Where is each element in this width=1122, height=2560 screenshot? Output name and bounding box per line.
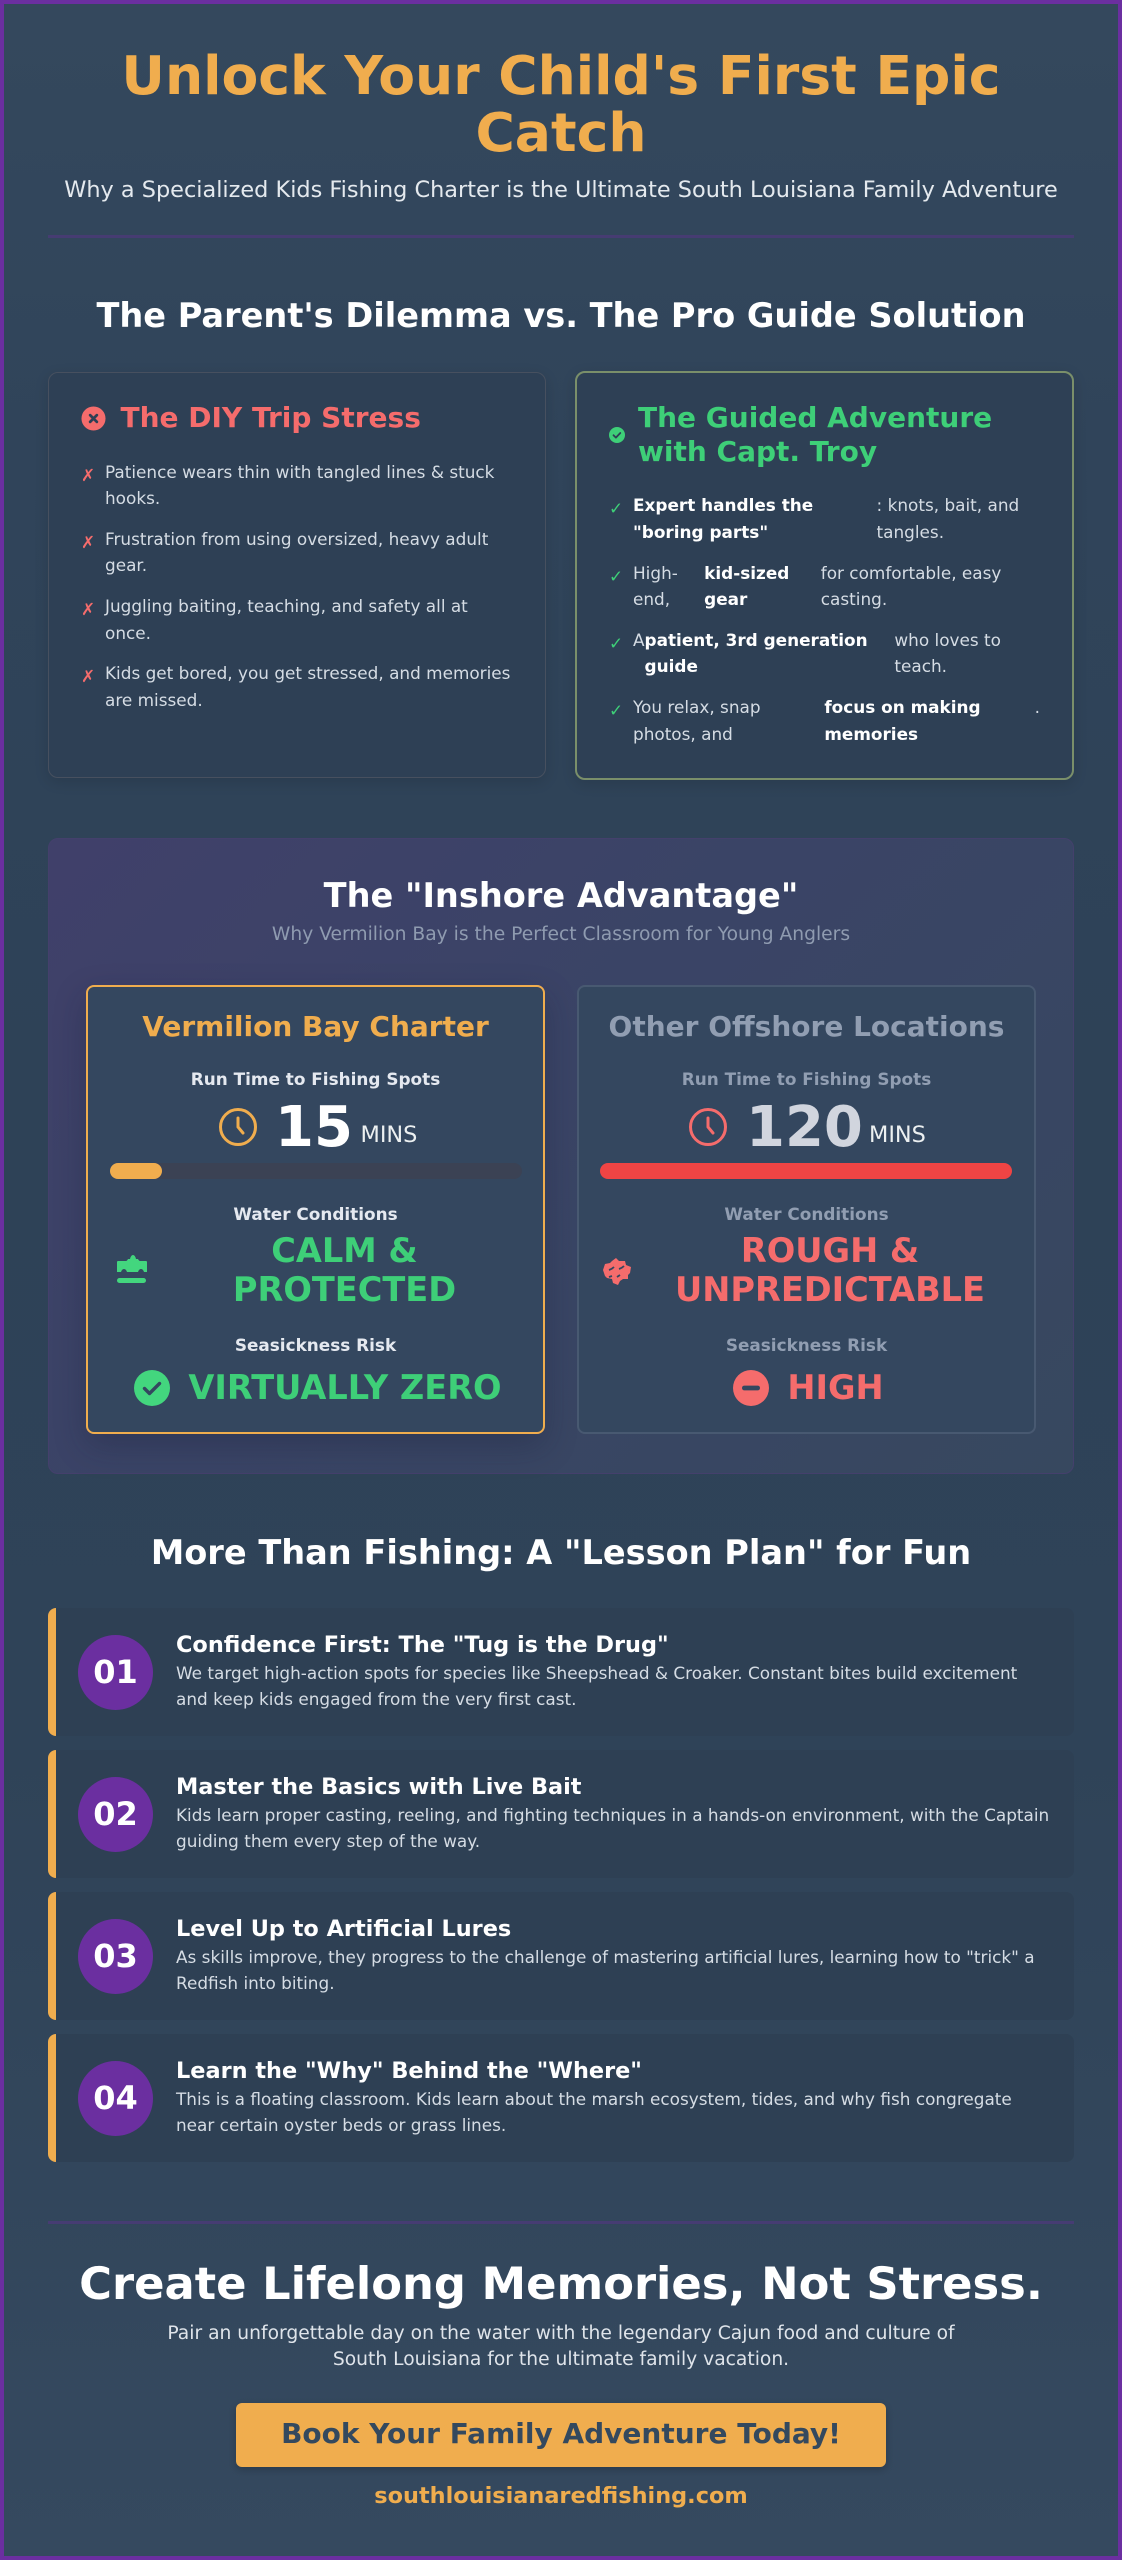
label: seasickness risk: Seasickness Risk [726,1335,887,1355]
value: calm & protected: PROTECTED [233,1270,456,1308]
panel: inshore advantage [48,838,1074,1474]
list: guided benefits: Expert handles the "boring parts" [633,495,813,542]
closing text [167,2323,955,2370]
heading: inshore advantage: The "Inshore Advantage" [324,876,798,915]
step text: This is a floating classroom. Kids learn about the marsh ecosystem, tides, and why fish congregate [176,2089,1012,2109]
label: water conditions: Water Conditions [724,1204,889,1224]
icon: rough water [603,1258,631,1285]
closing heading: Create Lifelong Memories, Not Stress. [79,2257,1043,2310]
number 04: 04 [93,2079,138,2117]
icon: x circle [82,406,106,430]
website link: southlouisianaredfishing.com [374,2483,748,2509]
number 02 [78,1777,153,1852]
label: water conditions: Water Conditions [233,1204,398,1224]
step text [176,1663,1017,1709]
list: guided benefits: patient, 3rd generation guide [645,630,868,676]
step 04 [48,2034,1074,2162]
value: rough & unpredictable: UNPREDICTABLE [675,1270,985,1308]
heading: lesson plan: More Than Fishing: A "Lesson Plan" for Fun [151,1533,971,1572]
card title: Other Offshore Locations [609,1010,1004,1043]
list: guided benefits: : knots, bait, and tangles. [877,495,1019,542]
list: DIY problems: Kids get bored, you get stressed, and memories are missed. [105,663,510,710]
step text: near certain oyster beds or grass lines. [176,2115,506,2135]
seasickness value [733,1368,884,1406]
icon: clock [219,1108,257,1146]
step text [176,2089,1012,2135]
list: DIY problems [83,462,510,710]
step title: Master the Basics with Live Bait [176,1774,582,1800]
step text: Kids learn proper casting, reeling, and fighting techniques in a hands-on environment, with the Captain [176,1805,1049,1825]
seasickness value: HIGH [787,1368,884,1406]
step text: and keep kids engaged from the very first cast. [176,1689,576,1709]
run time value: 120 [746,1095,863,1160]
label: run time: Run Time to Fishing Spots [191,1069,440,1089]
list: DIY problems: Frustration from using oversized, heavy adult gear. [105,529,488,575]
value: calm & protected [233,1231,456,1308]
bar: 15 minutes [110,1163,522,1179]
list: guided benefits: You relax, snap photos, and . [633,697,1040,744]
step text [176,1947,1035,1993]
step text: Redfish into biting. [176,1973,335,1993]
run time value: 15 [275,1095,353,1160]
list: guided benefits: A who loves to teach. [633,630,1001,676]
value: calm & protected: CALM & [271,1231,418,1270]
number 03 [78,1919,153,1994]
bar: 120 minutes [600,1163,1012,1179]
step 02 [48,1750,1074,1878]
icon: check circle [609,427,625,443]
card: Vermilion Bay Charter [86,985,545,1434]
icon: minus circle [733,1370,769,1406]
label: seasickness risk: Seasickness Risk [235,1335,396,1355]
number 02: 02 [93,1795,138,1833]
seasickness value: VIRTUALLY ZERO [188,1368,502,1406]
icon: check circle [134,1370,170,1406]
list: guided benefits: focus on making memories [824,697,981,744]
panel: DIY trip stress [48,372,546,778]
icon: calm water [117,1255,147,1283]
step 03 [48,1892,1074,2020]
list: DIY problems: Patience wears thin with tangled lines & stuck hooks. [105,462,494,508]
card: Other Offshore Locations [577,985,1036,1434]
closing text: Pair an unforgettable day on the water with the legendary Cajun food and culture of [167,2323,955,2344]
button: book adventure [236,2403,886,2467]
button: book adventure: Book Your Family Adventure Today! [281,2417,841,2450]
list: DIY problems: Juggling baiting, teaching, and safety all at once. [105,596,468,643]
step text: We target high-action spots for species like Sheepshead & Croaker. Constant bites build excitement [176,1663,1017,1683]
panel: guided adventure [575,371,1074,780]
list: guided benefits: kid-sized gear [704,563,789,609]
label: run time: Run Time to Fishing Spots [682,1069,931,1089]
card title: Vermilion Bay Charter [142,1010,489,1043]
step 01 [48,1608,1074,1736]
closing text: South Louisiana for the ultimate family vacation. [333,2349,789,2370]
step title: Level Up to Artificial Lures [176,1916,511,1942]
value: rough & unpredictable [675,1231,985,1308]
title: Unlock Your Child's First Epic Catch [121,44,1001,164]
subheading: inshore advantage: Why Vermilion Bay is the Perfect Classroom for Young Anglers [272,924,850,945]
subtitle: Why a Specialized Kids Fishing Charter is the Ultimate South Louisiana Family Adventure [64,177,1058,203]
heading: dilemma vs solution: The Parent's Dilemma vs. The Pro Guide Solution [96,296,1026,335]
step text [176,1805,1049,1851]
number 03: 03 [93,1937,138,1975]
step text: As skills improve, they progress to the challenge of mastering artificial lures, learning how to "trick" a [176,1947,1035,1967]
unit: MINS [869,1122,926,1148]
list: guided benefits [612,495,1040,744]
value: rough & unpredictable: ROUGH & [741,1231,919,1270]
icon: clock [689,1108,727,1146]
number 01 [78,1635,153,1710]
number 04 [78,2061,153,2136]
number 01: 01 [93,1653,138,1691]
heading: guided adventure: The Guided Adventure with Capt. Troy [638,401,992,468]
unit: MINS [360,1122,417,1148]
step title: Learn the "Why" Behind the "Where" [176,2058,642,2084]
step title: Confidence First: The "Tug is the Drug" [176,1632,669,1658]
step text: guiding them every step of the way. [176,1831,480,1851]
list: guided benefits: High-end, for comfortable, easy casting. [633,563,1001,609]
heading: DIY trip: The DIY Trip Stress [120,401,421,434]
